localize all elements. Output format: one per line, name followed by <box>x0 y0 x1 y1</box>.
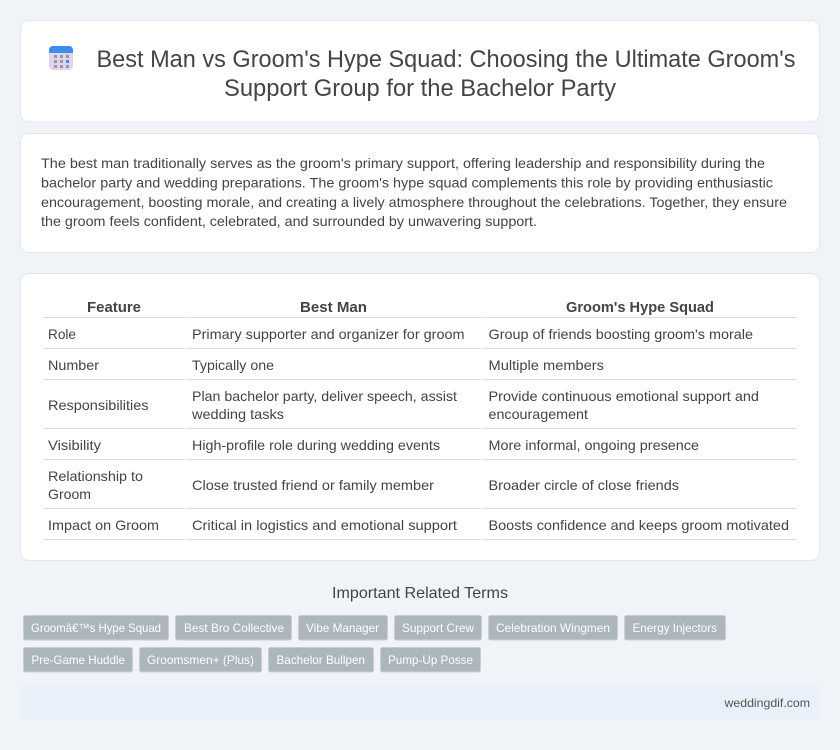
tag: Celebration Wingmen <box>496 621 610 635</box>
table header: Groom's Hype Squad <box>566 300 714 316</box>
related term tags <box>24 616 726 672</box>
tag: Pre-Game Huddle <box>32 653 125 667</box>
row: responsibilities: encouragement <box>488 406 588 422</box>
tag: Groomâ€™s Hype Squad <box>31 621 161 635</box>
tag <box>268 648 374 672</box>
tag <box>176 616 292 640</box>
intro paragraph: the groom feels confident, celebrated, and surrounded by unwavering support. <box>41 213 537 229</box>
title heading: Best Man vs Groom's Hype Squad: Choosing the Ultimate Groom's <box>96 46 796 73</box>
tag <box>24 648 132 672</box>
row: role <box>48 326 753 342</box>
row: visibility: Visibility <box>48 437 101 453</box>
row: role: Role <box>48 326 76 342</box>
row: relationship to groom <box>48 468 679 502</box>
row: number: Typically one <box>192 357 274 373</box>
row: number: Multiple members <box>488 357 604 373</box>
row: responsibilities: Provide continuous emotional support and <box>488 388 759 404</box>
row: visibility <box>48 437 699 453</box>
row: number: Number <box>48 357 99 373</box>
title heading: Support Group for the Bachelor Party <box>224 75 616 102</box>
row: number <box>48 357 604 373</box>
row: relationship to groom: Broader circle of close friends <box>488 477 679 493</box>
table header: Feature <box>87 300 141 316</box>
table header <box>87 300 714 316</box>
intro paragraph: The best man traditionally serves as the groom's primary support, offering leadership and responsibility during the <box>41 155 765 171</box>
row: impact on groom: Boosts confidence and keeps groom motivated <box>488 517 789 533</box>
panel: introduction <box>20 134 820 252</box>
intro paragraph <box>41 155 787 229</box>
tag <box>624 616 726 640</box>
tag: Pump-Up Posse <box>388 653 473 667</box>
row: impact on groom: Critical in logistics and emotional support <box>192 517 457 533</box>
tag: Energy Injectors <box>632 621 717 635</box>
row: impact on groom <box>48 517 789 533</box>
row: visibility: More informal, ongoing presence <box>488 437 699 453</box>
footer <box>20 686 820 720</box>
tag: Vibe Manager <box>306 621 379 635</box>
intro paragraph: encouragement, boosting morale, and creating a lively atmosphere throughout the celebrations. Together, they ensure <box>41 194 787 210</box>
tag <box>488 616 618 640</box>
row: relationship to groom: Close trusted friend or family member <box>192 477 434 493</box>
tag <box>24 616 168 640</box>
footer: weddingdif.com <box>723 696 810 710</box>
title heading <box>96 46 796 102</box>
row: visibility: High-profile role during wedding events <box>192 437 440 453</box>
row: responsibilities: Responsibilities <box>48 397 148 413</box>
row: role: Primary supporter and organizer for groom <box>192 326 464 342</box>
heading: important related terms: Important Related Terms <box>332 585 508 602</box>
row: responsibilities: Plan bachelor party, deliver speech, assist <box>192 388 457 404</box>
tag <box>380 648 480 672</box>
icon: calendar <box>49 46 73 70</box>
panel: comparison table <box>20 274 820 560</box>
row: impact on groom: Impact on Groom <box>48 517 159 533</box>
row: role: Group of friends boosting groom's morale <box>488 326 753 342</box>
intro paragraph: bachelor party and wedding preparations. The groom's hype squad complements this role by providing enthusiastic <box>41 174 773 190</box>
tag <box>298 616 388 640</box>
tag: Groomsmen+ (Plus) <box>147 653 254 667</box>
tag: Bachelor Bullpen <box>276 653 365 667</box>
row: responsibilities <box>48 388 759 422</box>
tag: Best Bro Collective <box>184 621 284 635</box>
tag <box>140 648 262 672</box>
row: responsibilities: wedding tasks <box>191 406 284 422</box>
tag <box>394 616 482 640</box>
table header: Best Man <box>300 300 367 316</box>
panel: title card <box>20 20 820 122</box>
row: relationship to groom: Groom <box>48 486 91 502</box>
tag: Support Crew <box>402 621 474 635</box>
row: relationship to groom: Relationship to <box>48 468 143 484</box>
